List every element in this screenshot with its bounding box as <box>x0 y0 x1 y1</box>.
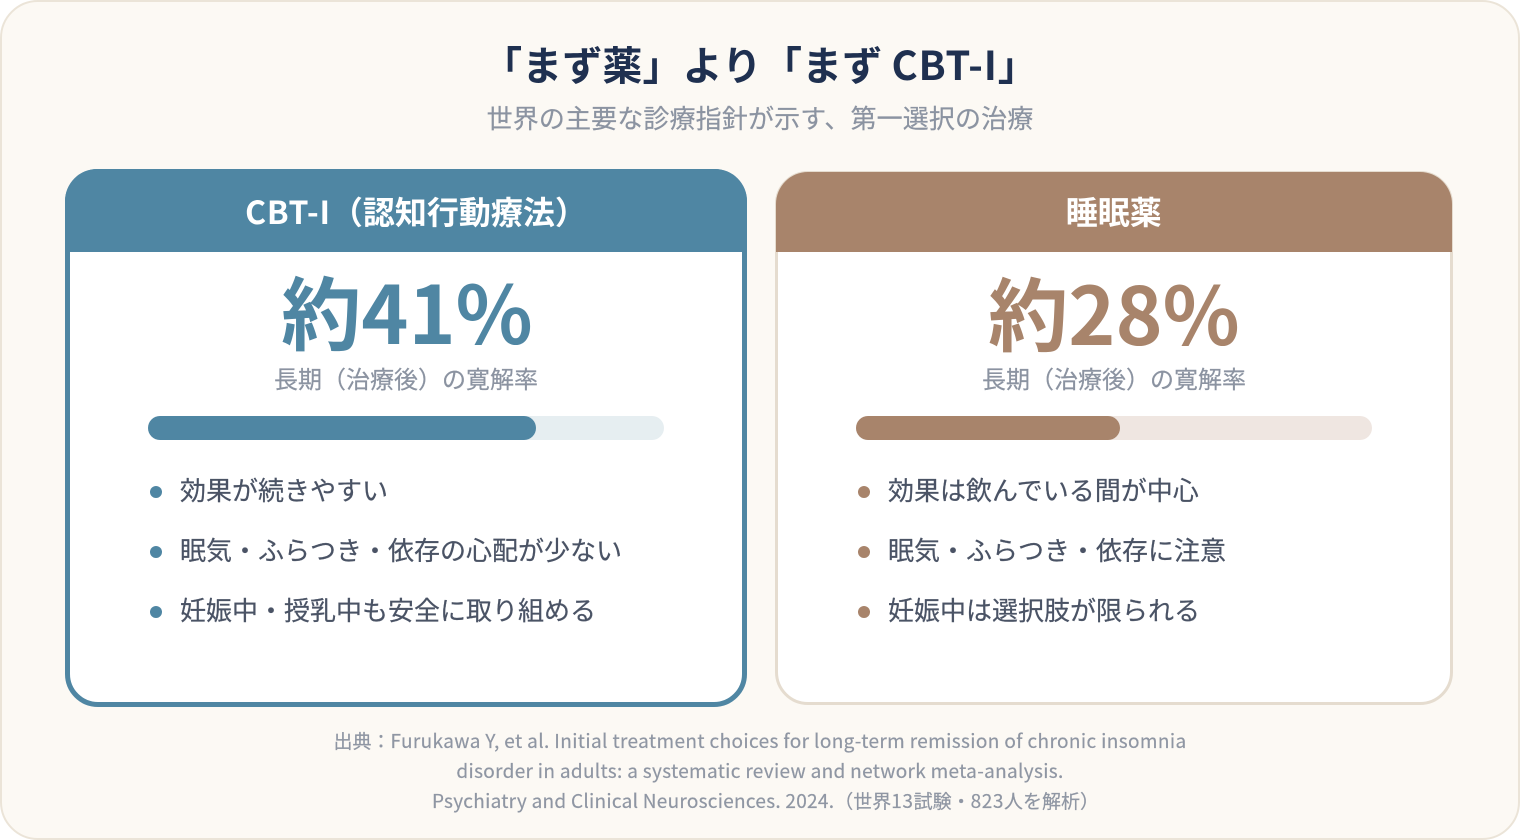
panel header: sleeping pills <box>776 172 1452 252</box>
progress fill <box>148 416 536 440</box>
bullet marker <box>150 546 162 558</box>
title: 「まず薬」より「まず CBT-I」 <box>482 34 1038 92</box>
panel header: CBT-I <box>65 169 747 252</box>
bullet text: 妊娠中・授乳中も安全に取り組める <box>180 591 596 628</box>
source citation: Psychiatry and Clinical Neurosciences. 2024.（世界13試験・823人を解析） <box>432 787 1099 814</box>
bullet text: 眠気・ふらつき・依存に注意 <box>888 531 1226 568</box>
bullet marker <box>150 486 162 498</box>
bullet text: 眠気・ふらつき・依存の心配が少ない <box>180 531 622 568</box>
panel: CBT-I <box>65 169 747 707</box>
bullet marker <box>858 486 870 498</box>
stat caption: 長期（治療後）の寛解率 <box>274 360 538 395</box>
source citation <box>333 727 1187 814</box>
stat caption: 長期（治療後）の寛解率 <box>982 360 1246 395</box>
bullet marker <box>858 546 870 558</box>
progress bar <box>856 416 1372 440</box>
progress fill <box>856 416 1120 440</box>
panel header: CBT-I: CBT-I（認知行動療法） <box>245 188 587 234</box>
subtitle: 世界の主要な診療指針が示す、第一選択の治療 <box>487 99 1033 136</box>
bullet text: 効果は飲んでいる間が中心 <box>888 471 1199 508</box>
panel: sleeping pills <box>774 171 1453 705</box>
source citation: disorder in adults: a systematic review and network meta-analysis. <box>456 757 1064 784</box>
source citation: 出典：Furukawa Y, et al. Initial treatment choices for long-term remission of chronic insomnia <box>333 727 1187 754</box>
progress bar <box>148 416 664 440</box>
bullet text: 効果が続きやすい <box>180 471 388 508</box>
stat: 41%: 約41% <box>281 252 533 368</box>
stat: 28%: 約28% <box>988 253 1240 369</box>
panel header: sleeping pills: 睡眠薬 <box>1066 188 1162 234</box>
bullet marker <box>858 606 870 618</box>
bullet marker <box>150 606 162 618</box>
bullet text: 妊娠中は選択肢が限られる <box>888 591 1200 628</box>
